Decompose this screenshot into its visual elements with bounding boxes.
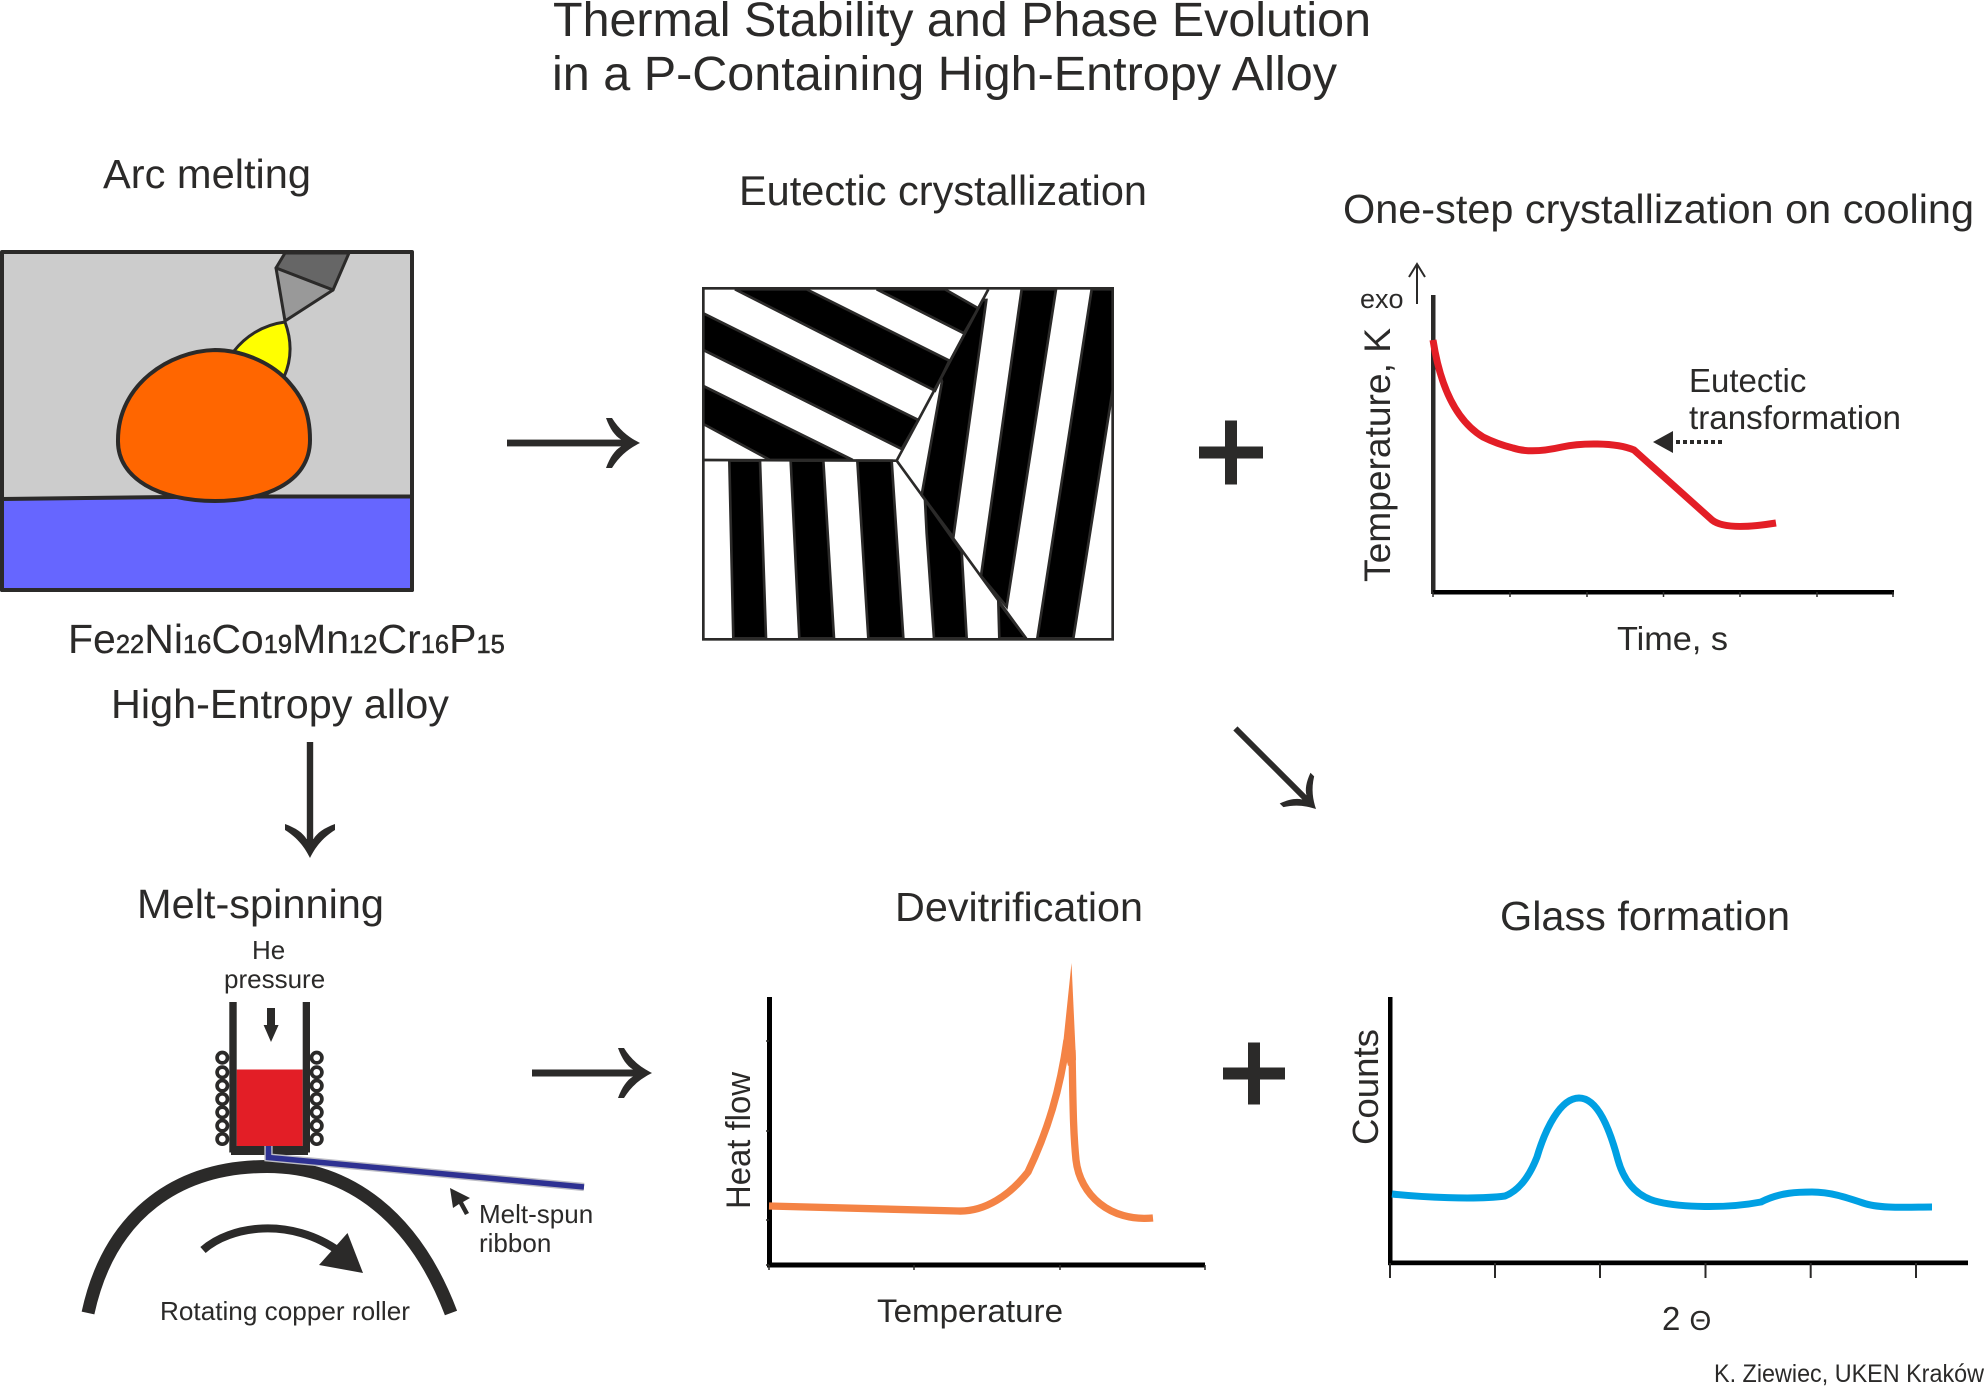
arrow: ribbon pointer: [450, 1188, 470, 1215]
heading: melt-spinning: Melt-spinning: [137, 881, 384, 927]
annotation: eutectic transformation: transformation: [1689, 399, 1901, 436]
blue diffraction curve: [1392, 1098, 1932, 1207]
title: in a P-Containing High-Entropy Alloy: [552, 48, 1337, 101]
panel: arc melting diagram: [2, 252, 412, 590]
plus sign: top: [1199, 420, 1263, 484]
x axis: [1433, 590, 1894, 597]
heading: one-step crystallization: One-step crystallization on cooling: [1343, 186, 1974, 232]
chart: XRD pattern: [1345, 997, 1968, 1337]
panel: melt-spinning diagram: [88, 935, 593, 1326]
heading: arc melting: Arc melting: [103, 151, 311, 197]
label: He pressure: pressure: [224, 964, 325, 994]
label: melt-spun ribbon: Melt-spun: [479, 1199, 593, 1229]
label: He pressure: He: [252, 935, 285, 965]
arrow: alloy to melt-spinning: [285, 742, 335, 858]
icon: melt in crucible: [237, 1070, 303, 1146]
annotation: eutectic transformation: [1689, 362, 1901, 436]
plus sign: bottom: [1223, 1042, 1285, 1104]
red temperature curve: [1433, 340, 1776, 526]
icon: crucible tube: [229, 1002, 310, 1155]
icon: electrode body: [276, 253, 349, 290]
icon: melt-spun ribbon: [268, 1146, 584, 1187]
y axis: [1431, 295, 1436, 594]
label: rotating copper roller: Rotating copper roller: [160, 1296, 410, 1326]
x axis label: Time, s: [1617, 621, 1728, 658]
title: [552, 0, 1371, 101]
label: melt-spun ribbon: [479, 1199, 593, 1258]
y axis label: Heat flow: [720, 1072, 758, 1209]
axes: [1388, 997, 1968, 1278]
panel: lamellar eutectic microstructure: [703, 288, 1113, 639]
x axis label: 2 Θ: [1662, 1300, 1711, 1337]
icon: rotation arrow: [203, 1228, 363, 1273]
label: exo: exo: [1360, 284, 1404, 314]
label: melt-spun ribbon: ribbon: [479, 1228, 551, 1258]
icon: electrode tip: [276, 268, 333, 321]
y axis label: Counts: [1345, 1029, 1386, 1145]
heading: glass formation: Glass formation: [1500, 893, 1790, 939]
chart: cooling curve: [1357, 264, 1901, 658]
icon: pressure arrow: [264, 1008, 279, 1042]
arrow: melt-spinning to devitrification: [532, 1048, 652, 1098]
axes: [766, 997, 1205, 1270]
chart: DSC heating curve: [720, 963, 1205, 1329]
y axis label: Temperature, K: [1357, 328, 1398, 582]
icon: induction coils: [217, 1052, 322, 1144]
icon: electric arc: [234, 322, 290, 377]
x axis label: Temperature: [877, 1293, 1063, 1329]
heading: eutectic crystallization: Eutectic crystallization: [739, 167, 1147, 214]
arrow: to glass formation: [1220, 713, 1331, 824]
label: He pressure: [224, 935, 325, 994]
icon: copper roller: [88, 1166, 451, 1313]
icon: molten alloy button: [118, 350, 310, 501]
arrow: dotted pointer: [1653, 431, 1722, 453]
heading: devitrification: Devitrification: [895, 884, 1143, 930]
arrow: exo direction: [1409, 264, 1425, 304]
orange heat flow curve: [769, 963, 1153, 1218]
annotation: eutectic transformation: Eutectic: [1689, 362, 1806, 399]
alloy formula: Fe22Ni16Co19Mn12Cr16P15: [68, 616, 505, 662]
arrow: arc melting to eutectic crystallization: [507, 418, 640, 468]
label: high-entropy alloy: High-Entropy alloy: [111, 681, 449, 727]
